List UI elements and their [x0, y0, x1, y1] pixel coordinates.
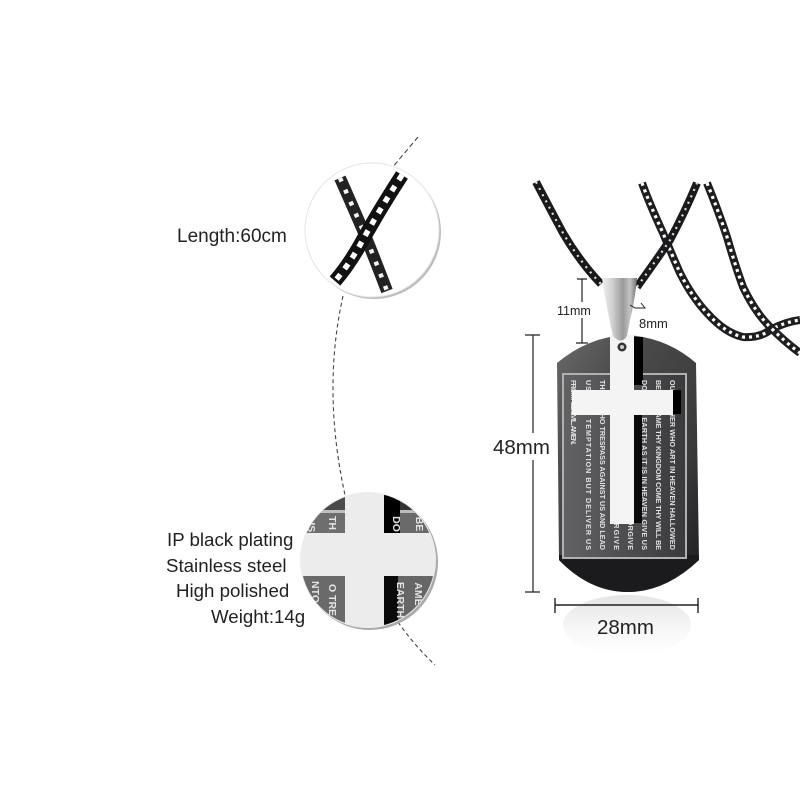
dimension: 8mm: 8mm	[639, 316, 668, 331]
engraved plate: US INTO TEMPTATION BUT DELIVER US	[584, 380, 593, 550]
detail circle: cross close-up: DO	[390, 516, 402, 532]
engraved plate: THIS DAY OUR DAILY BREAD AND FORGIVE	[626, 380, 635, 550]
engraved plate: US OUR TRESPASSES AS WE FORGIVE	[612, 380, 621, 550]
necklace chains	[536, 182, 800, 353]
detail circle: cross close-up: BE	[413, 517, 425, 531]
dimension: 8mm	[630, 303, 668, 331]
dimension: 28mm: 28mm	[597, 616, 654, 639]
detail circle: cross close-up: NTO	[309, 581, 321, 603]
dashed connector: middle	[333, 296, 345, 495]
engraved plate	[563, 337, 686, 558]
detail circle: chain	[305, 163, 441, 299]
dashed connector: lower	[398, 622, 435, 665]
dimension: 48mm: 48mm	[493, 436, 550, 459]
engraved plate: OUR FATHER WHO ART IN HEAVEN HALLOWED	[668, 380, 677, 550]
label: plating: IP black plating	[167, 529, 293, 550]
engraved plate: BE THY NAME THY KINGDOM COME THY WILL BE	[654, 380, 663, 550]
engraved plate: THOSE WHO TRESPASS AGAINST US AND LEAD	[598, 380, 607, 550]
label: finish: High polished	[176, 580, 289, 601]
engraved plate: DONE ON EARTH AS IT IS IN HEAVEN GIVE US	[640, 380, 649, 550]
tag reflection	[563, 595, 691, 655]
dimension: 11mm	[557, 279, 591, 343]
detail circle: cross close-up: TH	[326, 516, 338, 530]
detail circle: cross close-up: AME	[412, 582, 424, 606]
bail	[602, 278, 637, 352]
detail circle: cross close-up: EARTH	[394, 582, 406, 618]
detail circle: cross close-up	[300, 492, 438, 630]
dimension: 11mm: 11mm	[557, 304, 591, 318]
dashed connector: upper	[392, 137, 418, 168]
cross pendant	[572, 335, 673, 524]
dimension: 48mm	[493, 335, 550, 592]
dimension: 28mm	[555, 598, 698, 639]
engraved plate: FROM ALL EVIL. AMEN.	[569, 380, 578, 445]
detail circle: cross close-up: US	[305, 518, 317, 532]
detail circle: cross close-up: O TRE	[326, 584, 338, 616]
label: material: Stainless steel	[166, 555, 286, 576]
label: length: Length:60cm	[177, 226, 287, 247]
label: weight: Weight:14g	[211, 606, 305, 627]
dog tag pendant	[557, 335, 699, 592]
